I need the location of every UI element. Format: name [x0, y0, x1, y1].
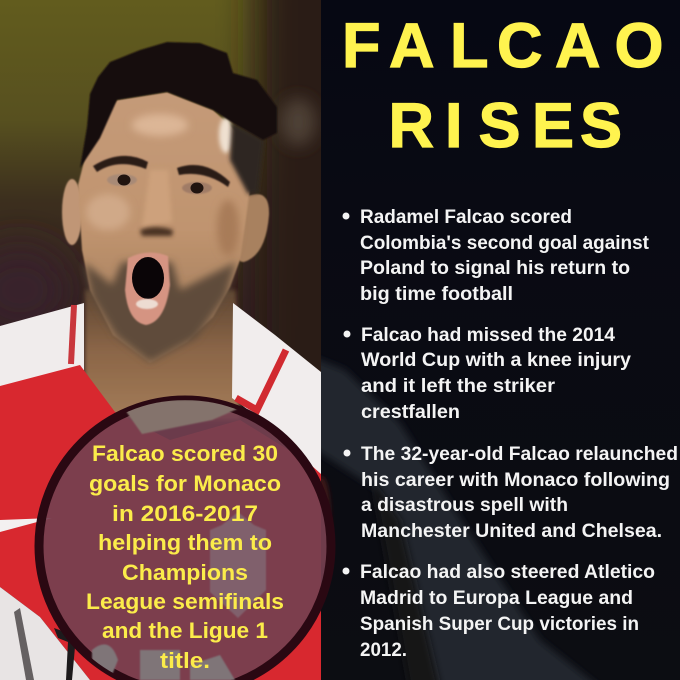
- circle text: League semifinals: [86, 589, 284, 614]
- open mouth: [125, 252, 170, 325]
- callout circle: [39, 400, 331, 680]
- eyebrows: [93, 156, 230, 187]
- bullet 3: Manchester United and Chelsea.: [361, 521, 662, 542]
- right panel: dark background with faint arm: [321, 356, 598, 680]
- circle text: [86, 441, 284, 673]
- side fade hair: [230, 122, 264, 194]
- title line: RISES: RISES: [388, 91, 622, 161]
- bullet 2: [344, 325, 631, 423]
- lower-left white print area: [0, 587, 90, 680]
- left collar stripe: [71, 305, 74, 364]
- bullet 1: big time football: [360, 284, 513, 305]
- shirt: [0, 303, 321, 680]
- hair: [80, 42, 277, 168]
- face: [78, 92, 250, 363]
- right shoulder white: [232, 303, 321, 474]
- circle text: Falcao scored 30: [92, 441, 278, 466]
- photo: Falcao shouting in Monaco shirt: [0, 0, 321, 680]
- sleeve flash: [0, 518, 52, 532]
- bullet 4: Madrid to Europa League and: [360, 588, 633, 609]
- bullet 1: Radamel Falcao scored: [360, 207, 572, 228]
- bullet 2: crestfallen: [361, 402, 460, 423]
- bullet 4: Falcao had also steered Atletico: [360, 562, 655, 583]
- facial shading and highlights: [86, 114, 239, 256]
- nose: [140, 227, 173, 236]
- left shoulder white: [0, 303, 84, 390]
- bullet 3: a disastrous spell with: [361, 495, 568, 516]
- details seen through the circle: [92, 400, 266, 680]
- right ear: [238, 194, 269, 262]
- circle text: Champions: [122, 560, 248, 585]
- bullet list: [342, 207, 678, 661]
- bullet 3: his career with Monaco following: [361, 470, 670, 491]
- circle text: in 2016-2017: [112, 501, 258, 526]
- bullet 1: [342, 207, 650, 305]
- right collar stripe: [236, 350, 286, 410]
- red body: [0, 365, 321, 680]
- bullet 2: and it left the striker: [361, 376, 556, 397]
- circle text: and the Ligue 1: [102, 618, 268, 643]
- beard: [84, 262, 236, 362]
- circle text: goals for Monaco: [89, 471, 281, 496]
- bullet 2: Falcao had missed the 2014: [361, 325, 615, 346]
- bullet 2: World Cup with a knee injury: [361, 350, 631, 371]
- title line: FALCAO: FALCAO: [342, 11, 664, 81]
- circle text: title.: [160, 648, 210, 673]
- bullet 4: 2012.: [360, 640, 407, 661]
- bullet 3: [344, 444, 678, 542]
- left ear: [62, 179, 82, 245]
- blurred stadium background: [0, 0, 321, 408]
- bullet 1: Poland to signal his return to: [360, 258, 630, 279]
- bullet 1: Colombia's second goal against: [360, 233, 650, 254]
- title: [342, 11, 664, 161]
- eyes: [107, 174, 212, 194]
- circle: [39, 400, 331, 680]
- bullet 4: Spanish Super Cup victories in: [360, 614, 639, 635]
- bullet 3: The 32-year-old Falcao relaunched: [361, 444, 678, 465]
- circle text: helping them to: [98, 530, 272, 555]
- neck: [84, 290, 240, 420]
- bullet 4: [342, 562, 655, 661]
